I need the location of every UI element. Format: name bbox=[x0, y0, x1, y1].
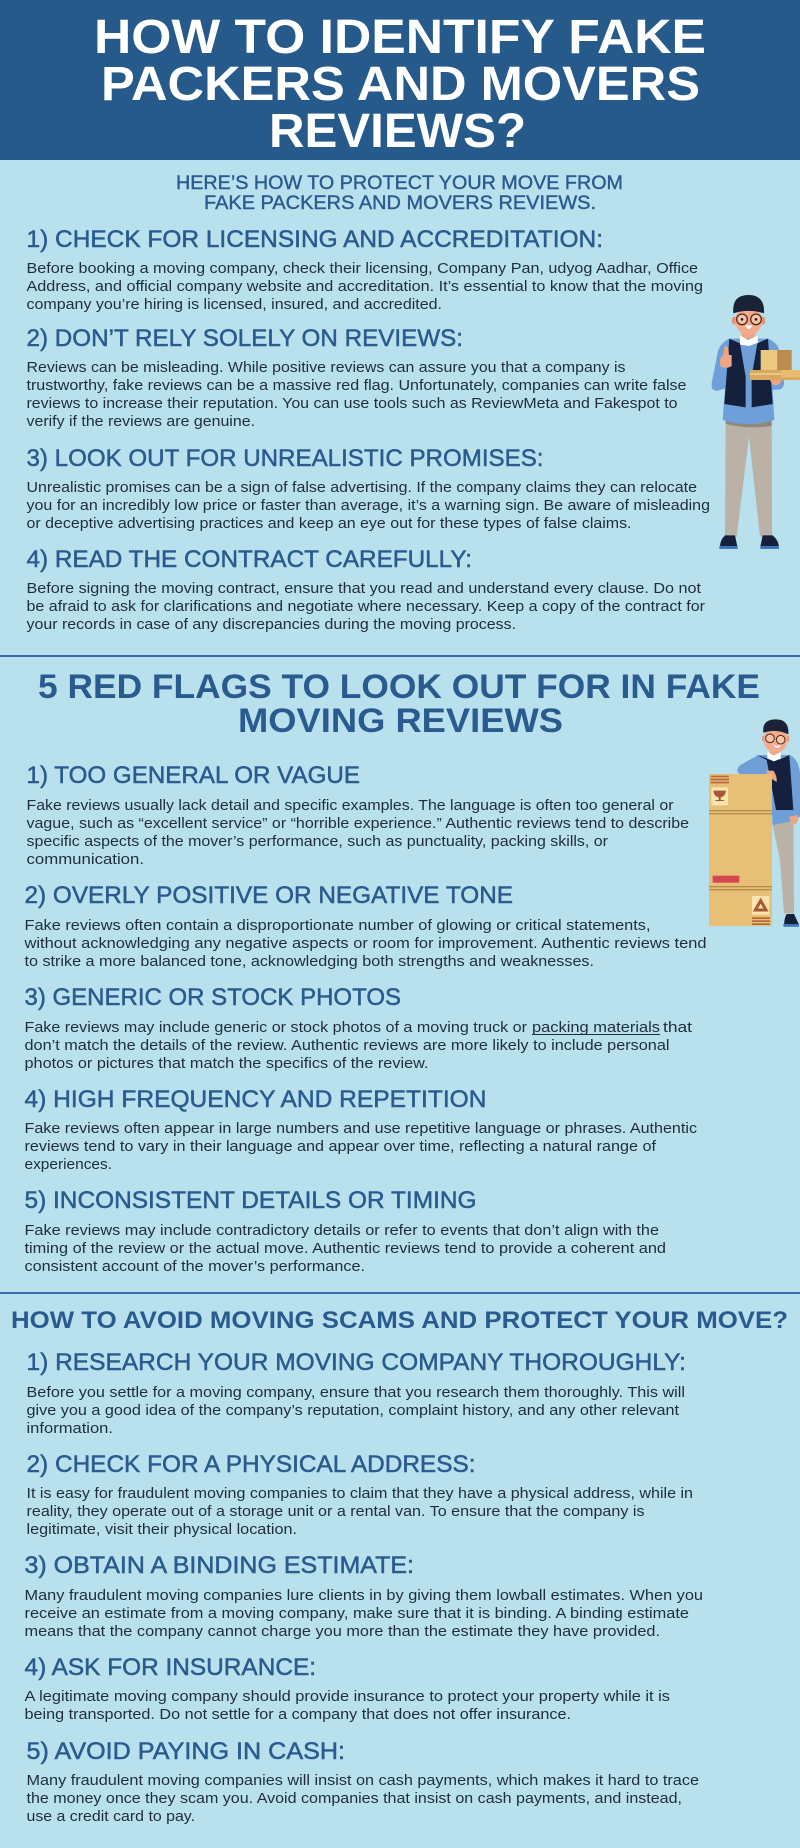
heading: address: 2) CHECK FOR A PHYSICAL ADDRESS: bbox=[26, 1451, 476, 1478]
heading: cash: 5) AVOID PAYING IN CASH: bbox=[26, 1738, 345, 1765]
text: insurance bbox=[24, 1688, 670, 1723]
text: research: information. bbox=[26, 1420, 113, 1437]
header banner bbox=[0, 0, 800, 160]
heading: insurance: 4) ASK FOR INSURANCE: bbox=[24, 1654, 316, 1681]
heading: research: 1) RESEARCH YOUR MOVING COMPANY THOROUGHLY: bbox=[26, 1349, 686, 1376]
title bbox=[94, 11, 706, 158]
text: tone: Fake reviews often contain a disproportionate number of glowing or critical statements, bbox=[24, 917, 650, 934]
title: HOW TO IDENTIFY FAKE bbox=[94, 11, 706, 64]
text: photos: Fake reviews may include generic or stock photos of a moving truck or bbox=[24, 1019, 527, 1036]
text: address: It is easy for fraudulent moving companies to claim that they have a physical address, while in bbox=[26, 1485, 693, 1502]
text: address bbox=[26, 1485, 693, 1538]
text: contract: be afraid to ask for clarifications and negotiate where necessary. Keep a copy of the contract for bbox=[26, 598, 705, 615]
text: vague: Fake reviews usually lack detail and specific examples. The language is often too general or bbox=[26, 797, 674, 814]
text: licensing bbox=[26, 260, 703, 313]
text: inconsistent: consistent account of the mover’s performance. bbox=[24, 1258, 365, 1275]
heading: reviews: 2) DON’T RELY SOLELY ON REVIEWS: bbox=[26, 325, 463, 352]
text: contract: Before signing the moving contract, ensure that you read and understand every clause. Do not bbox=[26, 580, 702, 597]
text: licensing: company you’re hiring is licensed, insured, and accredited. bbox=[26, 296, 442, 313]
text: photos: that bbox=[663, 1019, 693, 1036]
subtitle: HERE’S HOW TO PROTECT YOUR MOVE FROM bbox=[176, 172, 623, 194]
text: estimate bbox=[24, 1587, 703, 1640]
text: frequency bbox=[24, 1120, 698, 1173]
text: photos: photos or pictures that match the specifics of the review. bbox=[24, 1055, 428, 1072]
text: vague: specific aspects of the mover’s performance, such as punctuality, packing skills, or bbox=[26, 833, 608, 850]
text: frequency: reviews tend to vary in their language and appear over time, reflecting a natural range of bbox=[24, 1138, 657, 1155]
divider line bbox=[0, 1292, 800, 1294]
text: cash: Many fraudulent moving companies will insist on cash payments, which makes it hard to trace bbox=[26, 1772, 699, 1789]
heading: red flags: MOVING REVIEWS bbox=[238, 702, 563, 740]
text: frequency: experiences. bbox=[24, 1156, 112, 1173]
text: insurance: being transported. Do not settle for a company that does not offer insurance. bbox=[24, 1706, 571, 1723]
subtitle: FAKE PACKERS AND MOVERS REVIEWS. bbox=[204, 192, 596, 214]
text: vague: communication. bbox=[26, 851, 144, 868]
text: tone: to strike a more balanced tone, acknowledging both strengths and weaknesses. bbox=[24, 953, 594, 970]
text: cash: the money once they scam you. Avoid companies that insist on cash payments, and instead, bbox=[26, 1790, 682, 1807]
heading: vague: 1) TOO GENERAL OR VAGUE bbox=[26, 762, 360, 789]
heading: promises: 3) LOOK OUT FOR UNREALISTIC PROMISES: bbox=[26, 445, 544, 472]
heading: estimate: 3) OBTAIN A BINDING ESTIMATE: bbox=[24, 1552, 414, 1579]
heading: contract: 4) READ THE CONTRACT CAREFULLY: bbox=[26, 546, 472, 573]
text: promises bbox=[26, 479, 710, 532]
text: contract: your records in case of any discrepancies during the moving process. bbox=[26, 616, 516, 633]
panel: red flags bbox=[23, 668, 760, 1275]
heading: avoid scams: HOW TO AVOID MOVING SCAMS AND PROTECT YOUR MOVE? bbox=[11, 1307, 788, 1334]
heading: tone: 2) OVERLY POSITIVE OR NEGATIVE TONE bbox=[24, 882, 513, 909]
text: frequency: Fake reviews often appear in large numbers and use repetitive language or phrases. Authentic bbox=[24, 1120, 698, 1137]
icon: mover holding boxes bbox=[712, 295, 800, 549]
text: promises: or deceptive advertising practices and keep an eye out for these types of false claims. bbox=[26, 515, 632, 532]
text: tone bbox=[23, 917, 706, 970]
text: insurance: A legitimate moving company should provide insurance to protect your property while it is bbox=[24, 1688, 670, 1705]
icon: mover leaning on box bbox=[709, 719, 800, 927]
text: research bbox=[26, 1384, 685, 1437]
text: estimate: Many fraudulent moving companies lure clients in by giving them lowball estimates. When you bbox=[24, 1587, 703, 1604]
text: inconsistent: Fake reviews may include contradictory details or refer to events that don’t align with the bbox=[24, 1222, 659, 1239]
text: reviews: verify if the reviews are genuine. bbox=[26, 413, 255, 430]
text: vague: vague, such as “excellent service” or “horrible experience.” Authentic reviews tend to describe bbox=[26, 815, 689, 832]
heading: inconsistent: 5) INCONSISTENT DETAILS OR TIMING bbox=[24, 1187, 476, 1214]
heading: photos: 3) GENERIC OR STOCK PHOTOS bbox=[24, 984, 401, 1011]
heading: licensing: 1) CHECK FOR LICENSING AND ACCREDITATION: bbox=[26, 226, 603, 253]
subtitle bbox=[176, 172, 623, 214]
text: vague bbox=[26, 797, 689, 868]
text: licensing: Address, and official company website and accreditation. It’s essential to know that the moving bbox=[26, 278, 703, 295]
text: estimate: means that the company cannot charge you more than the estimate they have provided. bbox=[24, 1623, 660, 1640]
text: promises: you for an incredibly low price or faster than average, it’s a warning sign. Be aware of misleading bbox=[26, 497, 710, 514]
title: PACKERS AND MOVERS bbox=[101, 58, 700, 111]
text: licensing: Before booking a moving company, check their licensing, Company Pan, udyog Aadhar, Office bbox=[26, 260, 698, 277]
text: photos bbox=[24, 1019, 693, 1072]
divider line bbox=[0, 655, 800, 657]
text: photos: packing materials bbox=[532, 1019, 660, 1036]
text: reviews: trustworthy, fake reviews can be a massive red flag. Unfortunately, companies can write false bbox=[26, 377, 686, 394]
text: research: give you a good idea of the company’s reputation, complaint history, and any other relevant bbox=[26, 1402, 680, 1419]
panel: avoid moving scams bbox=[11, 1307, 788, 1825]
text: address: legitimate, visit their physical location. bbox=[26, 1521, 297, 1538]
text: promises: Unrealistic promises can be a sign of false advertising. If the company claims they can relocate bbox=[26, 479, 697, 496]
heading: red flags bbox=[38, 668, 760, 740]
text: contract bbox=[26, 580, 705, 633]
title: REVIEWS? bbox=[269, 105, 526, 158]
text: reviews bbox=[26, 359, 686, 430]
heading: red flags: 5 RED FLAGS TO LOOK OUT FOR IN FAKE bbox=[38, 668, 760, 706]
text: cash bbox=[26, 1772, 699, 1825]
panel: protect your move tips bbox=[26, 226, 710, 633]
text: inconsistent: timing of the review or the actual move. Authentic reviews tend to provide a coherent and bbox=[24, 1240, 666, 1257]
text: research: Before you settle for a moving company, ensure that you research them thoroughly. This will bbox=[26, 1384, 685, 1401]
text: photos: don’t match the details of the review. Authentic reviews are more likely to include personal bbox=[24, 1037, 670, 1054]
text: tone: without acknowledging any negative aspects or room for improvement. Authentic reviews tend bbox=[23, 935, 706, 952]
heading: frequency: 4) HIGH FREQUENCY AND REPETITION bbox=[24, 1086, 487, 1113]
text: reviews: Reviews can be misleading. While positive reviews can assure you that a company is bbox=[26, 359, 626, 376]
text: inconsistent bbox=[24, 1222, 666, 1275]
text: address: reality, they operate out of a storage unit or a rental van. To ensure that the company is bbox=[26, 1503, 644, 1520]
text: reviews: reviews to increase their reputation. You can use tools such as ReviewMeta and Fakespot to bbox=[26, 395, 678, 412]
text: cash: use a credit card to pay. bbox=[26, 1808, 195, 1825]
text: estimate: receive an estimate from a moving company, make sure that it is binding. A binding estimate bbox=[24, 1605, 689, 1622]
